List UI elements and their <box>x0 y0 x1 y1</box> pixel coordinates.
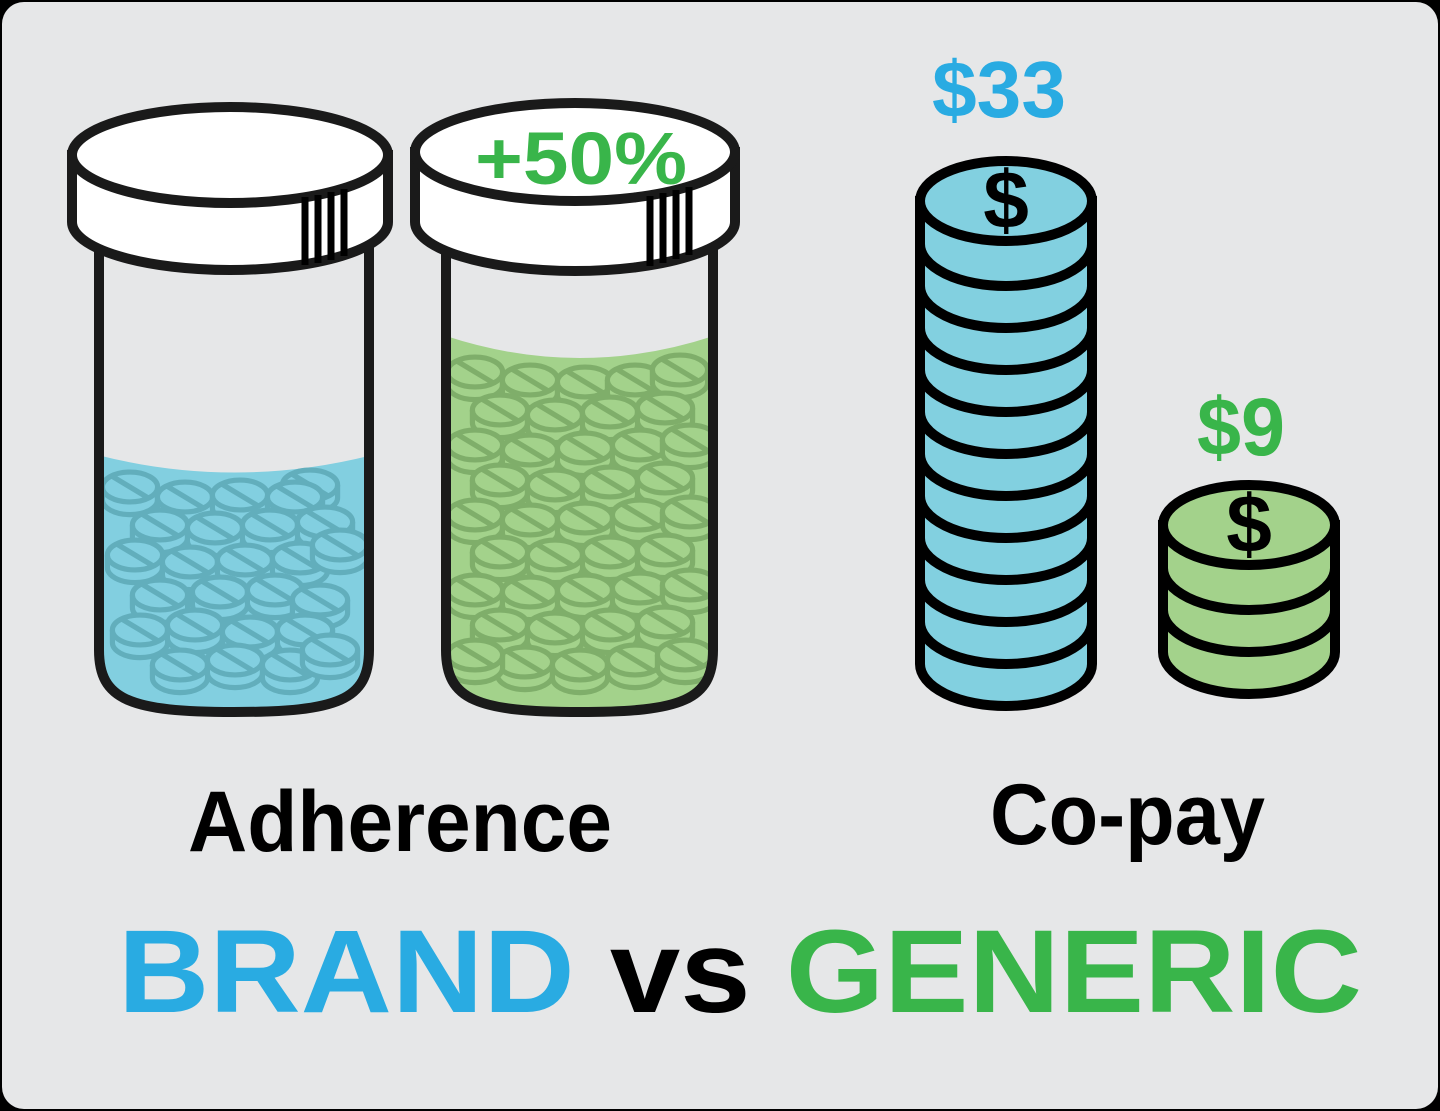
coin stack: brand $33 <box>920 155 1092 706</box>
coin stack: brand $33: $ <box>983 155 1029 246</box>
+50% label: +50% <box>475 117 687 200</box>
jar: brand (blue) <box>72 107 388 720</box>
title: BRAND vs GENERIC: BRAND vs GENERIC <box>118 906 1362 1038</box>
coin stack: generic $9 <box>1163 479 1335 694</box>
caption: Adherence: Adherence <box>188 774 612 870</box>
coin stack: generic $9: $ <box>1226 479 1272 570</box>
label $9: $9 <box>1197 382 1285 473</box>
jar: generic (green) <box>415 103 735 720</box>
caption: Co-pay: Co-pay <box>990 767 1265 863</box>
label $33: $33 <box>932 45 1066 134</box>
lid <box>72 107 388 270</box>
lid <box>415 103 735 271</box>
